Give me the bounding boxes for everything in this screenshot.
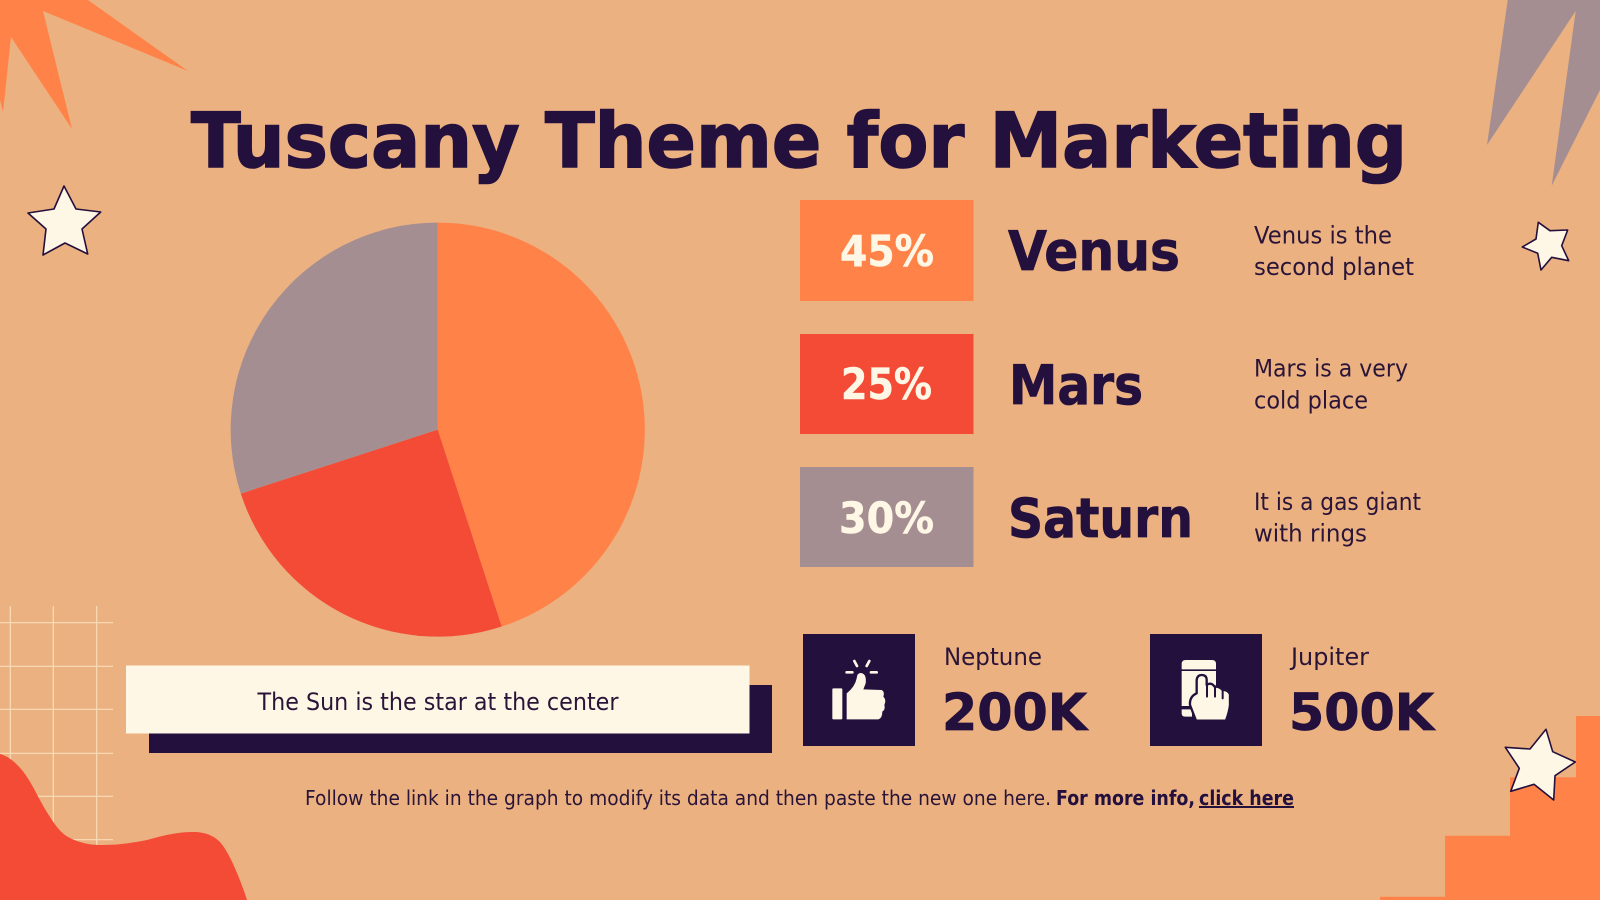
legend row: Saturn xyxy=(800,467,1421,567)
percentage box: 45% xyxy=(800,200,974,301)
footer note: click here xyxy=(1199,786,1294,810)
label: Mars: Mars xyxy=(1009,354,1143,417)
percentage value: 30%: 30% xyxy=(839,494,934,544)
pie slice: Venus 45% xyxy=(438,223,645,626)
stat: Neptune xyxy=(803,634,1089,746)
caption bar shadow xyxy=(149,685,772,753)
decoration: orange stairs bottom-right xyxy=(1380,716,1600,900)
description: Saturn: with rings xyxy=(1254,520,1367,548)
value: 500K: 500K xyxy=(1289,684,1436,743)
label: Saturn: Saturn xyxy=(1008,487,1193,550)
legend row: Venus xyxy=(800,200,1414,301)
decoration: orange starburst top-left xyxy=(0,0,188,129)
label: Neptune: Neptune xyxy=(944,643,1042,671)
label: Venus: Venus xyxy=(1008,220,1180,283)
decoration: red blob bottom-left xyxy=(0,754,247,900)
description: Saturn: It is a gas giant xyxy=(1254,488,1421,516)
label: Jupiter: Jupiter xyxy=(1289,643,1369,671)
title: Tuscany Theme for Marketing xyxy=(191,96,1407,185)
caption text: The Sun is the star at the center xyxy=(257,688,619,716)
icon: thumbs up xyxy=(803,634,915,746)
footer note: For more info, xyxy=(1056,786,1195,810)
icon: hand tapping phone xyxy=(1150,634,1262,746)
percentage box: 30% xyxy=(800,467,974,567)
icon: star right xyxy=(1522,222,1569,270)
caption bar panel xyxy=(126,666,750,734)
footer note: Follow the link in the graph to modify its data and then paste the new one here. xyxy=(305,786,1051,810)
description: Venus: Venus is the xyxy=(1254,222,1392,250)
legend row: Mars xyxy=(800,334,1408,434)
pie slice: Saturn 30% xyxy=(231,223,438,494)
icon: star left xyxy=(28,186,101,255)
description: Venus: second planet xyxy=(1254,253,1414,281)
description: Mars: Mars is a very xyxy=(1254,354,1408,382)
percentage box: 25% xyxy=(800,334,974,434)
value: 200K: 200K xyxy=(942,684,1089,743)
caption bar xyxy=(126,666,772,753)
pie chart xyxy=(231,223,645,637)
decoration: mauve spikes top-right xyxy=(1487,0,1600,186)
description: Mars: cold place xyxy=(1254,386,1368,414)
pie slice: Mars 25% xyxy=(241,430,502,637)
icon: star bottom-right xyxy=(1505,729,1575,800)
percentage value: 25%: 25% xyxy=(841,360,932,410)
stat: Jupiter xyxy=(1150,634,1436,746)
percentage value: 45%: 45% xyxy=(840,227,934,277)
